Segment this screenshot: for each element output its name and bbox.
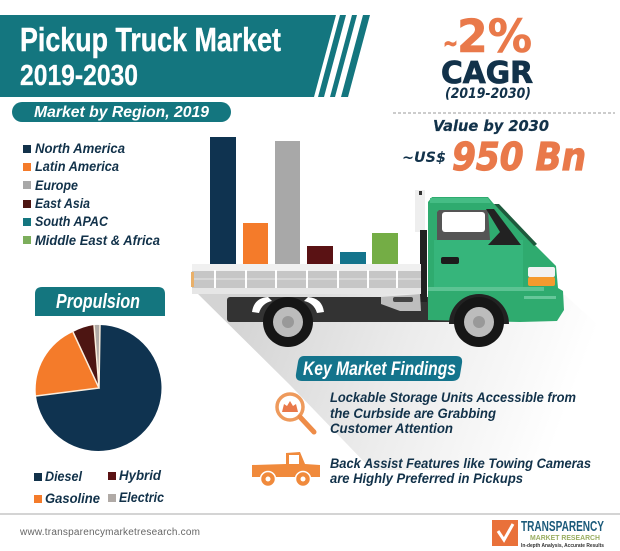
legend: propulsion: Diesel [45,468,83,484]
cab body [428,197,564,322]
cab window [437,210,490,240]
icon: magnifier [277,394,314,432]
CAGR callout: ~ [443,29,458,59]
CAGR callout: CAGR [441,56,533,91]
finding text 1 [330,390,576,436]
finding text 1: Lockable Storage Units Accessible from [330,390,576,405]
CAGR callout: 2% [457,10,532,63]
title [20,21,281,92]
website url: www.transparencymarketresearch.com [19,527,200,538]
heading: key market findings: Key Market Findings [303,359,456,380]
front wheel arch [449,294,509,324]
heading: market by region: Market by Region, 2019 [34,104,209,121]
chassis [227,297,462,322]
legend: regions: Middle East & Africa [35,232,160,248]
legend: propulsion [34,467,164,506]
header banner [0,15,370,97]
value callout: 950 Bn [452,135,586,179]
title: Pickup Truck Market [20,21,281,58]
legend: regions: North America [35,140,125,156]
legend: regions: Europe [35,177,78,193]
flat bed [192,264,421,293]
value callout [402,117,586,179]
finding text 2 [330,456,591,486]
legend: regions: East Asia [35,195,90,211]
rear wheel [263,297,313,347]
headlight [528,267,555,277]
heading: propulsion: Propulsion [56,291,140,313]
truck illustration [191,190,564,347]
finding text 2: Back Assist Features like Towing Cameras [330,456,591,471]
legend: regions [23,140,160,248]
logo: In-depth Analysis, Accurate Results [521,543,604,549]
door handle [441,257,459,264]
pie chart [36,325,161,451]
CAGR callout: (2019-2030) [445,86,531,102]
logo: MARKET RESEARCH [530,533,600,542]
logo [492,519,604,549]
title: 2019-2030 [20,60,138,92]
finding text 2: are Highly Preferred in Pickups [330,471,523,486]
value callout: Value by 2030 [433,117,549,135]
finding text 1: Customer Attention [330,421,453,436]
bar chart [210,137,398,264]
legend: propulsion: Electric [119,489,164,505]
bumper highlight [524,296,556,299]
value callout: ~US$ [402,150,446,166]
CAGR callout [441,10,533,102]
legend: regions: South APAC [35,213,109,229]
finding text 1: the Curbside are Grabbing [330,406,497,421]
rear fender [252,297,324,313]
front wheel [454,297,504,347]
legend: regions: Latin America [35,158,119,174]
truck long shadow [197,293,620,470]
heading: market by region [12,102,231,122]
exhaust pole [415,190,425,232]
icon: pickup truck [252,452,320,486]
heading: propulsion [35,287,165,316]
legend: propulsion: Gasoline [45,490,100,506]
legend: propulsion: Hybrid [119,467,161,483]
